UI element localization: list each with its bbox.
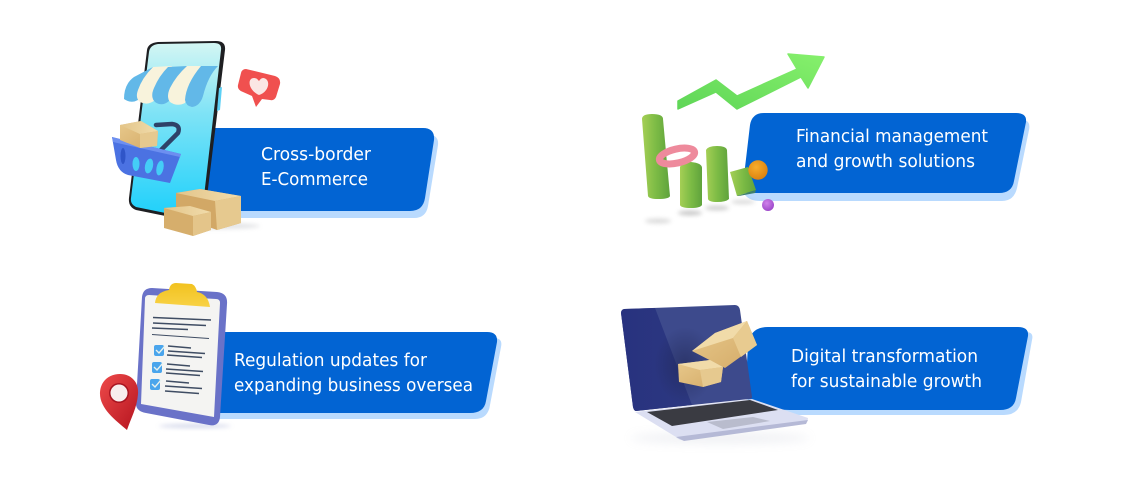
label text xyxy=(261,145,372,190)
label shadow xyxy=(745,332,1032,415)
flying parcels xyxy=(678,321,757,387)
panel: financial management xyxy=(642,54,1029,224)
label text xyxy=(234,351,473,396)
icon: location pin xyxy=(100,374,138,430)
label text xyxy=(796,127,988,172)
label shadow xyxy=(215,338,501,419)
label box xyxy=(745,327,1028,410)
icon: laptop xyxy=(621,305,810,443)
label shadow xyxy=(745,120,1029,201)
clip xyxy=(155,283,210,307)
panel: cross-border e-commerce xyxy=(112,41,438,236)
icon: 3D bar chart xyxy=(642,114,774,224)
orange ball xyxy=(748,160,768,180)
label text: Financial management xyxy=(796,127,988,147)
panel: regulation updates xyxy=(100,283,501,430)
ring xyxy=(658,145,696,167)
panel: digital transformation xyxy=(621,305,1032,443)
label text: expanding business oversea xyxy=(234,376,473,396)
awning xyxy=(124,66,218,107)
label text xyxy=(791,347,982,392)
checkboxes xyxy=(150,345,165,390)
icon: growth arrow xyxy=(678,54,824,109)
label box xyxy=(215,332,497,413)
icon: heart bubble xyxy=(238,69,280,107)
text lines xyxy=(152,318,211,394)
label text: E-Commerce xyxy=(261,170,368,190)
label text: Regulation updates for xyxy=(234,351,428,371)
box in basket xyxy=(120,121,158,148)
label text: Digital transformation xyxy=(791,347,978,367)
purple ball xyxy=(762,199,774,211)
label text: Cross-border xyxy=(261,145,372,165)
icon: shopping phone xyxy=(112,41,260,236)
laptop base xyxy=(635,399,808,440)
label text: for sustainable growth xyxy=(791,372,982,392)
label box xyxy=(742,113,1026,193)
label text: and growth solutions xyxy=(796,152,975,172)
parcels xyxy=(164,189,241,236)
label shadow xyxy=(212,135,438,218)
label box xyxy=(205,128,434,211)
laptop screen xyxy=(621,305,752,411)
icon: clipboard xyxy=(136,283,231,428)
basket xyxy=(112,124,181,183)
